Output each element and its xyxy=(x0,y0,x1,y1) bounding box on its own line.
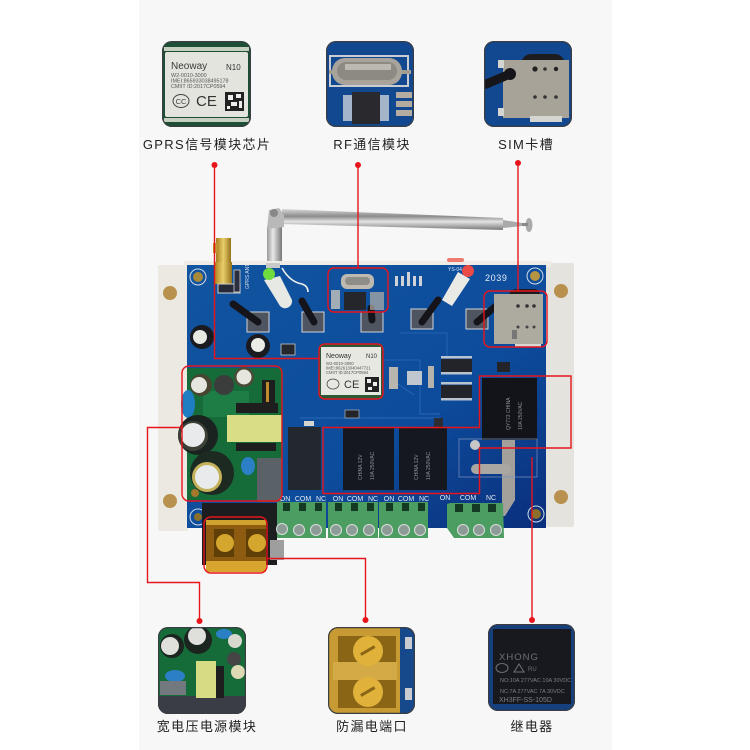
green terminals with labels xyxy=(276,495,504,538)
thumbnail: RF module xyxy=(326,41,414,127)
callout: relay leader line xyxy=(323,376,571,623)
LED red with tube xyxy=(442,265,474,306)
GPRS chip on board: IMEI:862613040447721 xyxy=(326,366,371,370)
thumbnail: GPRS chip: W2-0010-3000 xyxy=(171,73,207,79)
GPRS chip on board: Neoway xyxy=(326,353,352,360)
relays: CHINA 12V xyxy=(358,454,364,480)
LED red with tube: YS-04 xyxy=(448,267,462,273)
push buttons with sticks xyxy=(233,300,503,332)
thumbnail: power module xyxy=(158,626,246,714)
large relay trace xyxy=(459,439,537,516)
relays: QY773 CHINA xyxy=(506,397,512,430)
green terminals with labels: ON xyxy=(333,496,343,503)
green terminals with labels: NC xyxy=(316,496,326,503)
relays: CHINA 12V xyxy=(414,454,420,480)
background panel xyxy=(139,0,612,750)
green terminals with labels: NC xyxy=(419,496,429,503)
RF crystal and chip on board xyxy=(331,274,384,310)
LED green with tube xyxy=(263,263,308,308)
green terminals with labels: COM xyxy=(347,496,363,503)
callout: GPRS leader line xyxy=(212,162,383,399)
thumbnail: fuse terminal xyxy=(328,627,415,714)
green terminals with labels: ON xyxy=(440,495,450,502)
thumbnail: SIM slot xyxy=(484,41,572,127)
GPRS chip on board: W2-0010-3000 xyxy=(326,361,354,366)
green terminals with labels: NC xyxy=(486,495,496,502)
relays: 10A 250VAC xyxy=(370,451,376,480)
callout: RF leader line xyxy=(328,162,388,312)
thumbnail: relay: RU xyxy=(528,667,537,673)
IC chips and SMD parts xyxy=(304,356,510,427)
capacitors on board xyxy=(190,325,295,358)
GPRS chip on board: CMIIT ID:2017CP0594 xyxy=(326,370,369,375)
device enclosure rails xyxy=(158,258,574,531)
thumbnail: GPRS chip: N10 xyxy=(226,63,241,72)
thumbnail: relay: XHONG xyxy=(499,652,539,663)
relays: 10A 250VAC xyxy=(518,401,524,430)
circuit board xyxy=(187,265,546,528)
green terminals with labels: COM xyxy=(295,496,311,503)
green terminals with labels: ON xyxy=(384,496,394,503)
relays: 10A 250VAC xyxy=(426,451,432,480)
thumbnail: GPRS chip xyxy=(162,41,251,127)
label: SIM slot: SIM卡槽 xyxy=(498,137,554,152)
fuse terminal xyxy=(202,503,284,572)
green terminals with labels: ON xyxy=(280,496,290,503)
relays xyxy=(288,378,537,490)
callout: SIM leader line xyxy=(484,160,547,347)
thumbnail: relay xyxy=(488,624,575,711)
label: power module: 宽电压电源模块 xyxy=(157,719,257,734)
thumbnail: GPRS chip: CMIIT ID:2017CP0594 xyxy=(171,84,225,90)
label: RF module: RF通信模块 xyxy=(333,137,411,152)
power module xyxy=(178,367,282,502)
thumbnail: relay: NC:7A 277VAC 7A 30VDC xyxy=(500,689,565,695)
SMA connector xyxy=(213,238,251,293)
callout: power module leader line xyxy=(148,366,282,624)
SIM slot on board xyxy=(494,289,543,347)
SMA connector: GPRS ANT xyxy=(245,264,251,289)
thumbnail: relay: NO:10A 277VAC 10A 30VDC xyxy=(500,678,571,684)
thumbnail: relay: XH3FF-SS-105D xyxy=(499,697,552,704)
thumbnail: GPRS chip: CC xyxy=(176,97,187,106)
antenna xyxy=(267,208,532,266)
circuit board: 2039 xyxy=(485,273,507,283)
thumbnail: GPRS chip: CE xyxy=(196,93,217,110)
green terminals with labels: NC xyxy=(368,496,378,503)
label: GPRS chip: GPRS信号模块芯片 xyxy=(143,137,271,152)
callout: fuse terminal leader line xyxy=(204,517,368,623)
GPRS chip on board xyxy=(319,344,383,399)
GPRS chip on board: CE xyxy=(344,379,359,391)
green terminals with labels: COM xyxy=(460,495,476,502)
thumbnail: GPRS chip: Neoway xyxy=(171,61,207,72)
thumbnail: GPRS chip: IMEI:865933038495178 xyxy=(171,78,229,84)
green terminals with labels: COM xyxy=(398,496,414,503)
GPRS chip on board: N10 xyxy=(366,354,378,360)
label: relay: 继电器 xyxy=(510,719,554,734)
label: fuse terminal: 防漏电端口 xyxy=(336,719,408,734)
